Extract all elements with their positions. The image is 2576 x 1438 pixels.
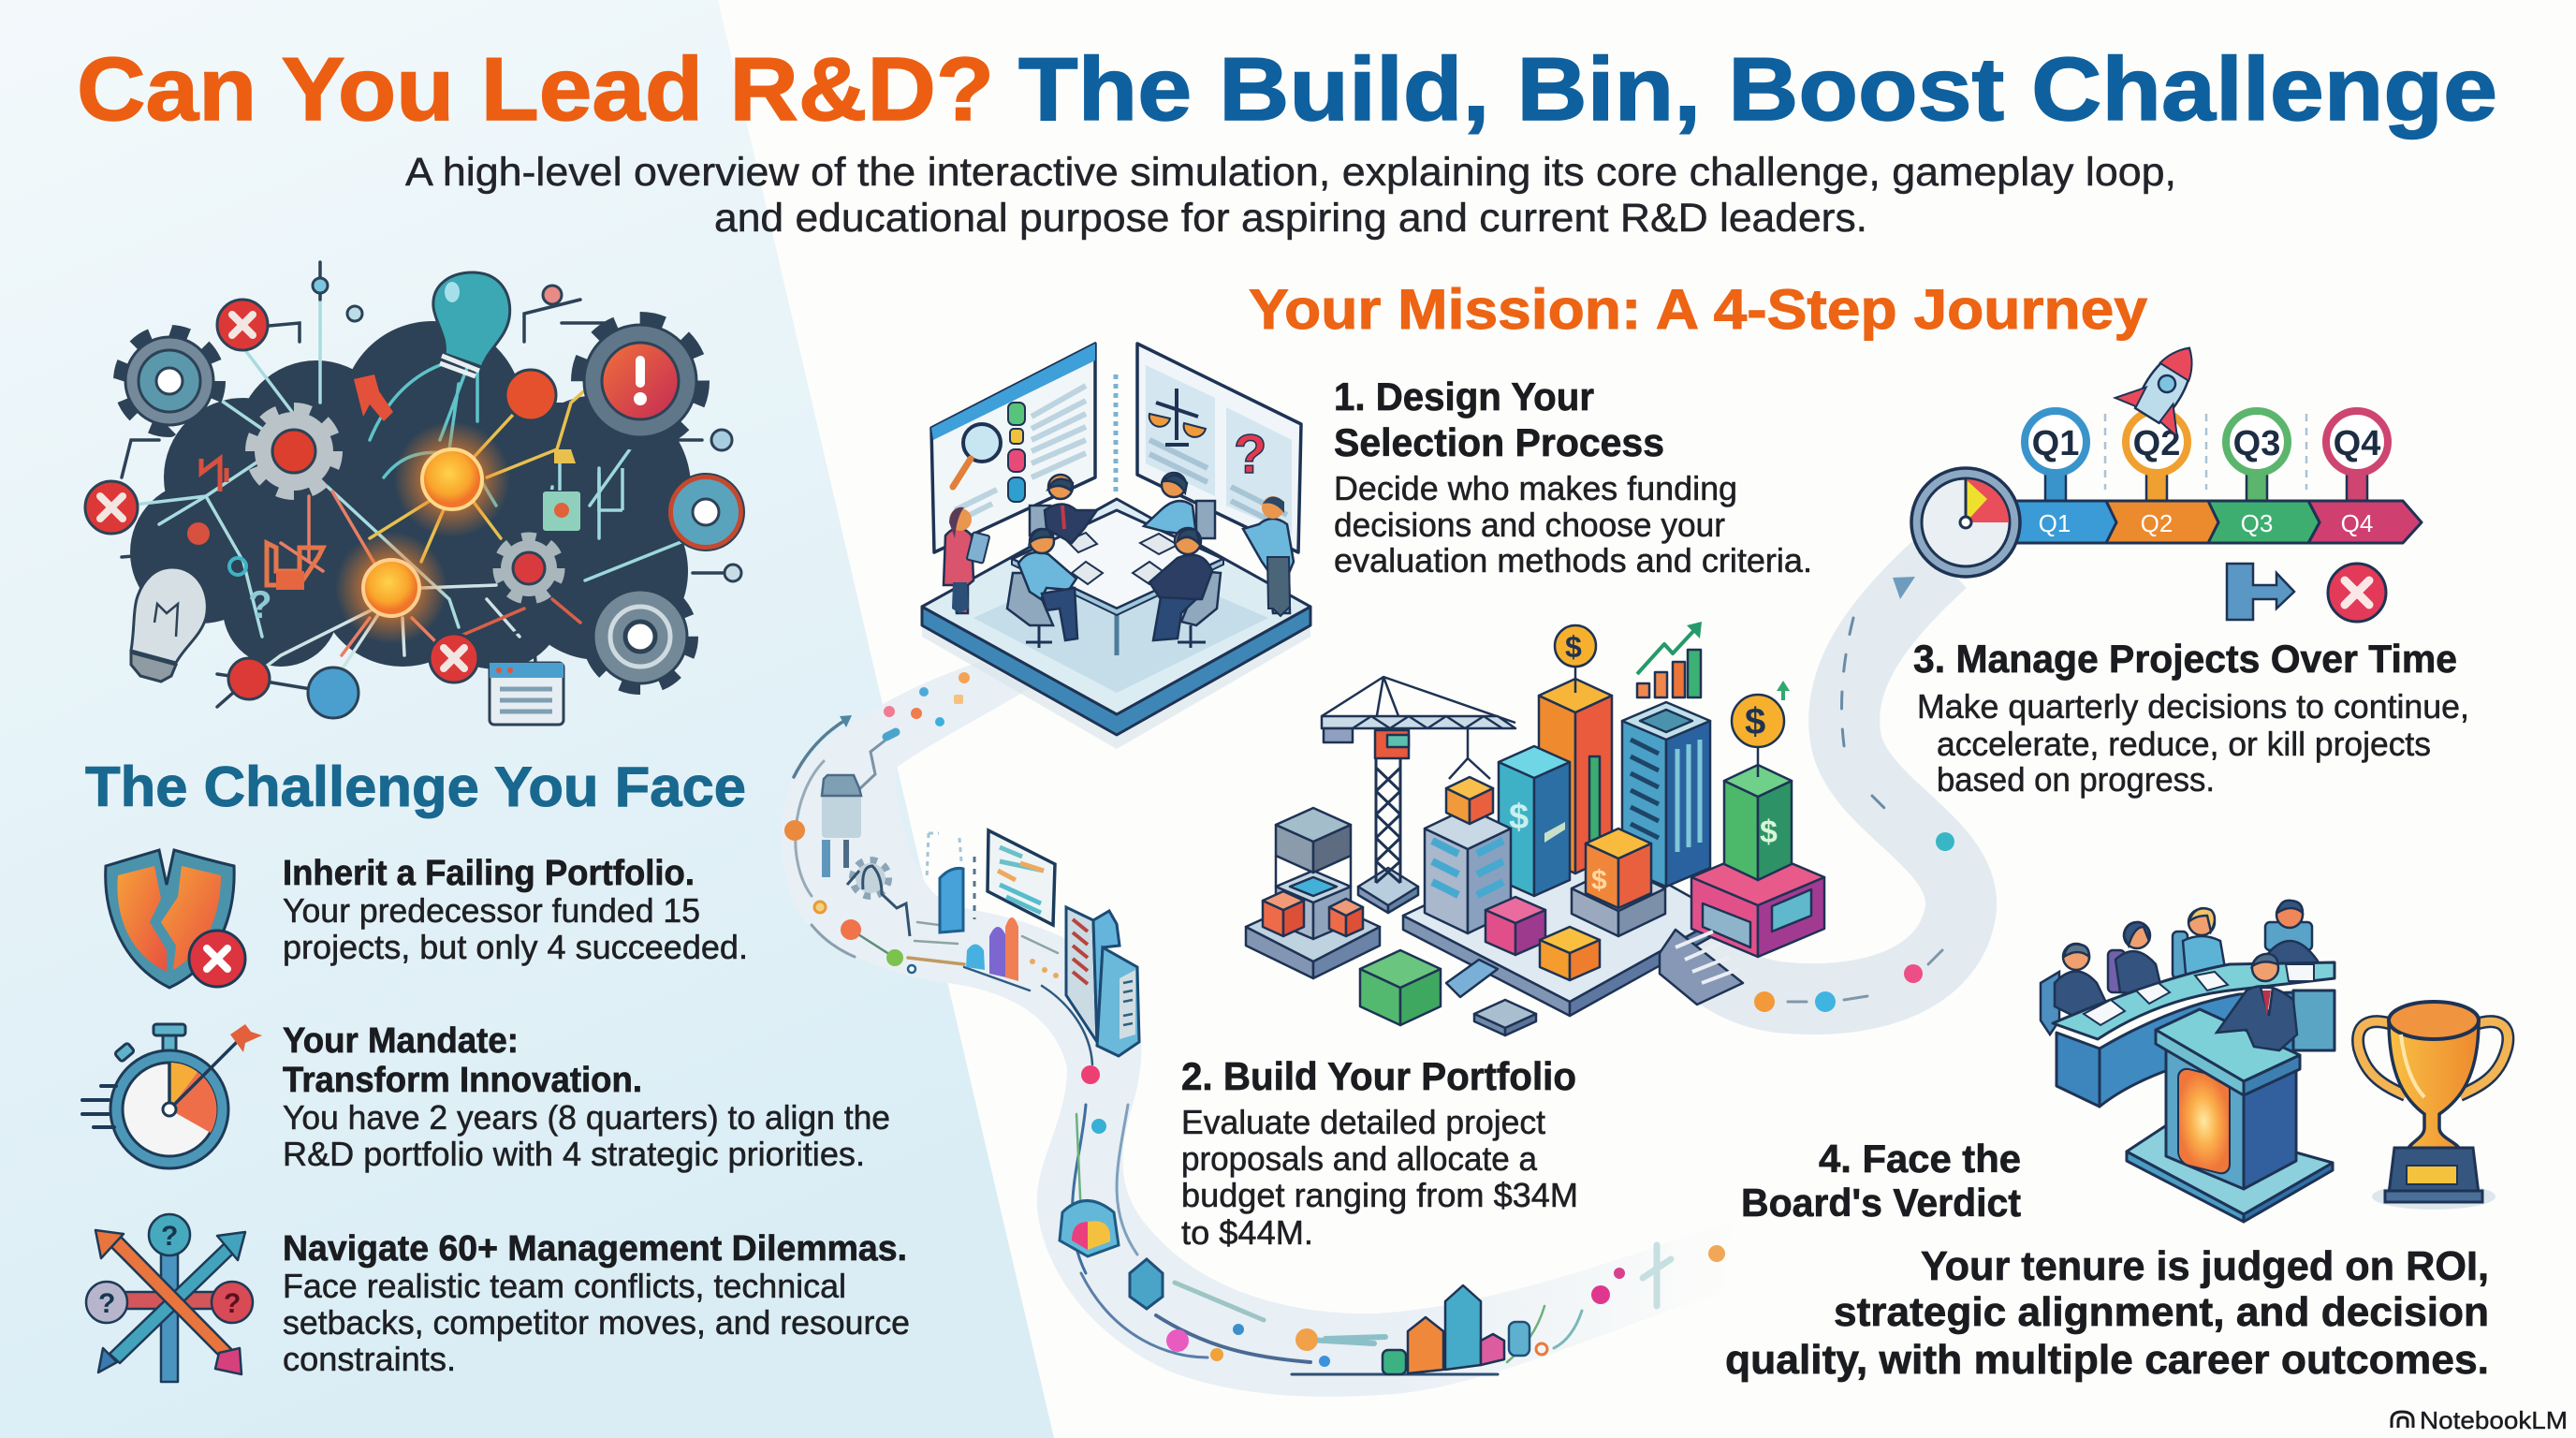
curved desk <box>2053 962 2334 1107</box>
illustration: tangled R&D network <box>85 262 744 725</box>
person: standing woman <box>944 507 989 613</box>
subtitle: A high-level overview of the interactive simulation, explaining its core challenge, gameplay loop, <box>405 150 2176 195</box>
text: dilemmas: constraints. <box>283 1340 456 1378</box>
magenta store: $ <box>1760 814 1778 850</box>
platform <box>922 607 1310 735</box>
front left person <box>1007 529 1077 648</box>
text: failing portfolio <box>283 854 748 966</box>
text: step 4 description: Your tenure is judged on ROI, <box>1921 1243 2489 1289</box>
lifted orange cube <box>1446 777 1493 824</box>
coins <box>1555 625 1784 777</box>
gear lower right <box>499 538 559 598</box>
meeting table <box>1012 510 1223 655</box>
illustration: step 3 quarterly timeline: Q3 <box>2233 424 2280 463</box>
text: step 4 description: strategic alignment, and decision <box>1834 1289 2489 1335</box>
text: step 3: accelerate, reduce, or kill projects <box>1937 725 2431 763</box>
text: step 2: proposals and allocate a <box>1181 1139 1538 1178</box>
icon: stopwatch <box>82 1024 262 1168</box>
circuit details: ? <box>248 582 272 626</box>
illustration: step 3 quarterly timeline: Q4 <box>2341 509 2373 537</box>
text: mandate: R&D portfolio with 4 strategic priorities. <box>283 1135 865 1173</box>
front orange cube <box>1540 927 1600 980</box>
gear big warning <box>582 323 698 439</box>
text: dilemmas: Navigate 60+ Management Dilemmas. <box>283 1229 907 1269</box>
illustration: step 3 quarterly timeline <box>1911 329 2422 622</box>
centre orange block on plinth: $ <box>1591 865 1607 896</box>
board members <box>2041 901 2320 1034</box>
seated people <box>1007 473 1221 648</box>
broken light bulb <box>131 567 207 682</box>
gear center <box>253 410 335 492</box>
illustration: step 2 isometric portfolio city <box>1246 622 1824 1035</box>
subtitle: and educational purpose for aspiring and current R&D leaders. <box>714 196 1867 241</box>
text: step 1: Decide who makes funding <box>1334 469 1737 507</box>
green cube <box>1360 950 1441 1025</box>
continue/reduce arrow <box>2227 564 2294 620</box>
small blocks <box>1446 960 1536 1035</box>
mini server <box>822 775 861 877</box>
small rising bar chart <box>1637 622 1790 700</box>
panel: left challenge background <box>0 0 1054 1438</box>
coins: $ <box>1745 701 1765 742</box>
text: step 1: Selection Process <box>1334 420 1664 464</box>
colour nodes <box>228 370 556 718</box>
mini blob node <box>1060 1200 1119 1256</box>
text: step 4 heading <box>1741 1137 2021 1225</box>
text: failing portfolio: Your predecessor funded 15 <box>283 891 700 930</box>
pink cube <box>1486 897 1545 955</box>
text: mandate <box>283 1021 890 1173</box>
person: standing man <box>1243 496 1294 616</box>
challenge item: failing portfolio <box>106 850 748 988</box>
mini coloured pillars <box>966 917 1018 981</box>
challenge item: mandate <box>82 1021 890 1173</box>
illustration: step 3 quarterly timeline: Q2 <box>2133 424 2180 463</box>
rocket <box>2115 329 2220 436</box>
dark cloud <box>130 321 691 669</box>
text: step 4 description: quality, with multiple career outcomes. <box>1725 1337 2489 1383</box>
text: mandate: Your Mandate: <box>283 1021 519 1061</box>
journey road: upper path from step 2 to step 3 <box>1685 562 1961 999</box>
right screen <box>1137 344 1301 552</box>
gear top left <box>123 334 216 428</box>
icon: crossing arrows <box>86 1214 253 1382</box>
trophy <box>2358 1002 2508 1210</box>
text: step 2: Evaluate detailed project <box>1181 1103 1545 1141</box>
challenge item: dilemmas <box>86 1214 910 1382</box>
crane <box>1322 677 1515 913</box>
subtitle <box>405 150 2176 241</box>
timeline arrow bar <box>2012 501 2422 543</box>
quarter pins <box>2025 411 2388 503</box>
logo: NotebookLM: NotebookLM <box>2420 1406 2568 1434</box>
journey road: lower path from step 1 to step 4 <box>782 662 1732 1397</box>
illustration: step 3 quarterly timeline: Q1 <box>2032 424 2079 463</box>
tall blue office <box>1622 702 1710 887</box>
text: step 2: budget ranging from $34M <box>1181 1176 1578 1214</box>
mini tall server <box>1066 907 1139 1056</box>
text: mandate: You have 2 years (8 quarters) to align the <box>283 1098 890 1137</box>
red failure markers <box>85 300 478 682</box>
illustration: step 4 board verdict <box>2041 901 2508 1222</box>
text: step 4 heading: Board's Verdict <box>1741 1181 2021 1225</box>
grey office building <box>1425 808 1511 933</box>
illustration: step 3 quarterly timeline: Q1 <box>2039 509 2071 537</box>
text: step 1: evaluation methods and criteria. <box>1334 541 1812 580</box>
text: failing portfolio: projects, but only 4 succeeded. <box>283 928 748 966</box>
left screen <box>931 344 1095 552</box>
coins: $ <box>1565 630 1582 664</box>
icon: crossing arrows: ? <box>224 1288 241 1319</box>
ring target <box>667 474 744 550</box>
text: step 3: 3. Manage Projects Over Time <box>1913 637 2457 681</box>
network lines <box>111 262 725 707</box>
glowing nodes <box>335 421 510 644</box>
back left person <box>1030 475 1097 543</box>
road markers and mini graphics <box>784 577 1954 1374</box>
clock <box>1911 468 2020 577</box>
central platform <box>1403 833 1724 1016</box>
text: failing portfolio: Inherit a Failing Portfolio. <box>283 854 695 893</box>
text: step 3 <box>1913 637 2469 799</box>
right screen: ? <box>1234 424 1266 485</box>
mini cube <box>1130 1259 1163 1309</box>
text: step 3: Make quarterly decisions to continue, <box>1917 687 2469 726</box>
text: step 1 <box>1334 374 1812 580</box>
tall orange building <box>1539 679 1612 873</box>
title: The Build, Bin, Boost Challenge <box>1018 39 2497 139</box>
illustration: step 3 quarterly timeline: Q3 <box>2241 509 2273 537</box>
text: mandate: Transform Innovation. <box>283 1061 642 1100</box>
text: dilemmas <box>283 1229 910 1378</box>
red curved arrow <box>354 374 393 421</box>
text: step 3: based on progress. <box>1937 760 2215 799</box>
magenta store <box>1691 765 1824 957</box>
text: step 4 heading: 4. Face the <box>1819 1137 2021 1181</box>
icon: crossing arrows: ? <box>161 1221 178 1252</box>
mini chart bar <box>927 833 974 932</box>
text: dilemmas: setbacks, competitor moves, and resource <box>283 1303 910 1342</box>
upper road arcs and dots <box>784 672 1092 1064</box>
teal building <box>1499 746 1570 896</box>
kill icon <box>2328 564 2386 622</box>
mini data card <box>988 830 1055 925</box>
circuit details <box>187 449 622 626</box>
text: step 4 description <box>1725 1243 2489 1383</box>
mini bar chart on road <box>1383 1285 1504 1374</box>
illustration: step 1 selection meeting <box>922 344 1310 749</box>
teal building: $ <box>1509 798 1529 837</box>
heading: The Challenge You Face: The Challenge You Face <box>85 756 746 818</box>
back right person <box>1144 473 1215 538</box>
icon: crossing arrows: ? <box>98 1288 115 1319</box>
centre orange block on plinth <box>1572 829 1665 936</box>
text: step 1: decisions and choose your <box>1334 506 1725 544</box>
text: step 2: to $44M. <box>1181 1213 1313 1252</box>
icon: broken shield <box>106 850 245 988</box>
left tower <box>1246 808 1380 978</box>
presenter <box>2217 954 2297 1050</box>
code window <box>490 663 564 725</box>
mini gears <box>847 861 910 936</box>
title <box>77 39 2497 139</box>
stairs <box>1660 930 1743 1005</box>
teal light bulb <box>433 272 510 376</box>
text: step 2 <box>1181 1054 1578 1252</box>
text: step 2: 2. Build Your Portfolio <box>1181 1054 1576 1098</box>
front right person <box>1149 528 1221 648</box>
text: step 1: 1. Design Your <box>1334 374 1594 418</box>
illustration: step 3 quarterly timeline: Q2 <box>2141 509 2173 537</box>
heading: Your Mission: Your Mission: A 4-Step Journey <box>1249 278 2148 341</box>
illustration: step 3 quarterly timeline: Q4 <box>2334 424 2380 463</box>
gear bottom right <box>592 588 689 685</box>
text: dilemmas: Face realistic team conflicts, technical <box>283 1267 846 1305</box>
title: Can You Lead R&D? <box>77 39 994 139</box>
podium <box>2127 1009 2333 1222</box>
